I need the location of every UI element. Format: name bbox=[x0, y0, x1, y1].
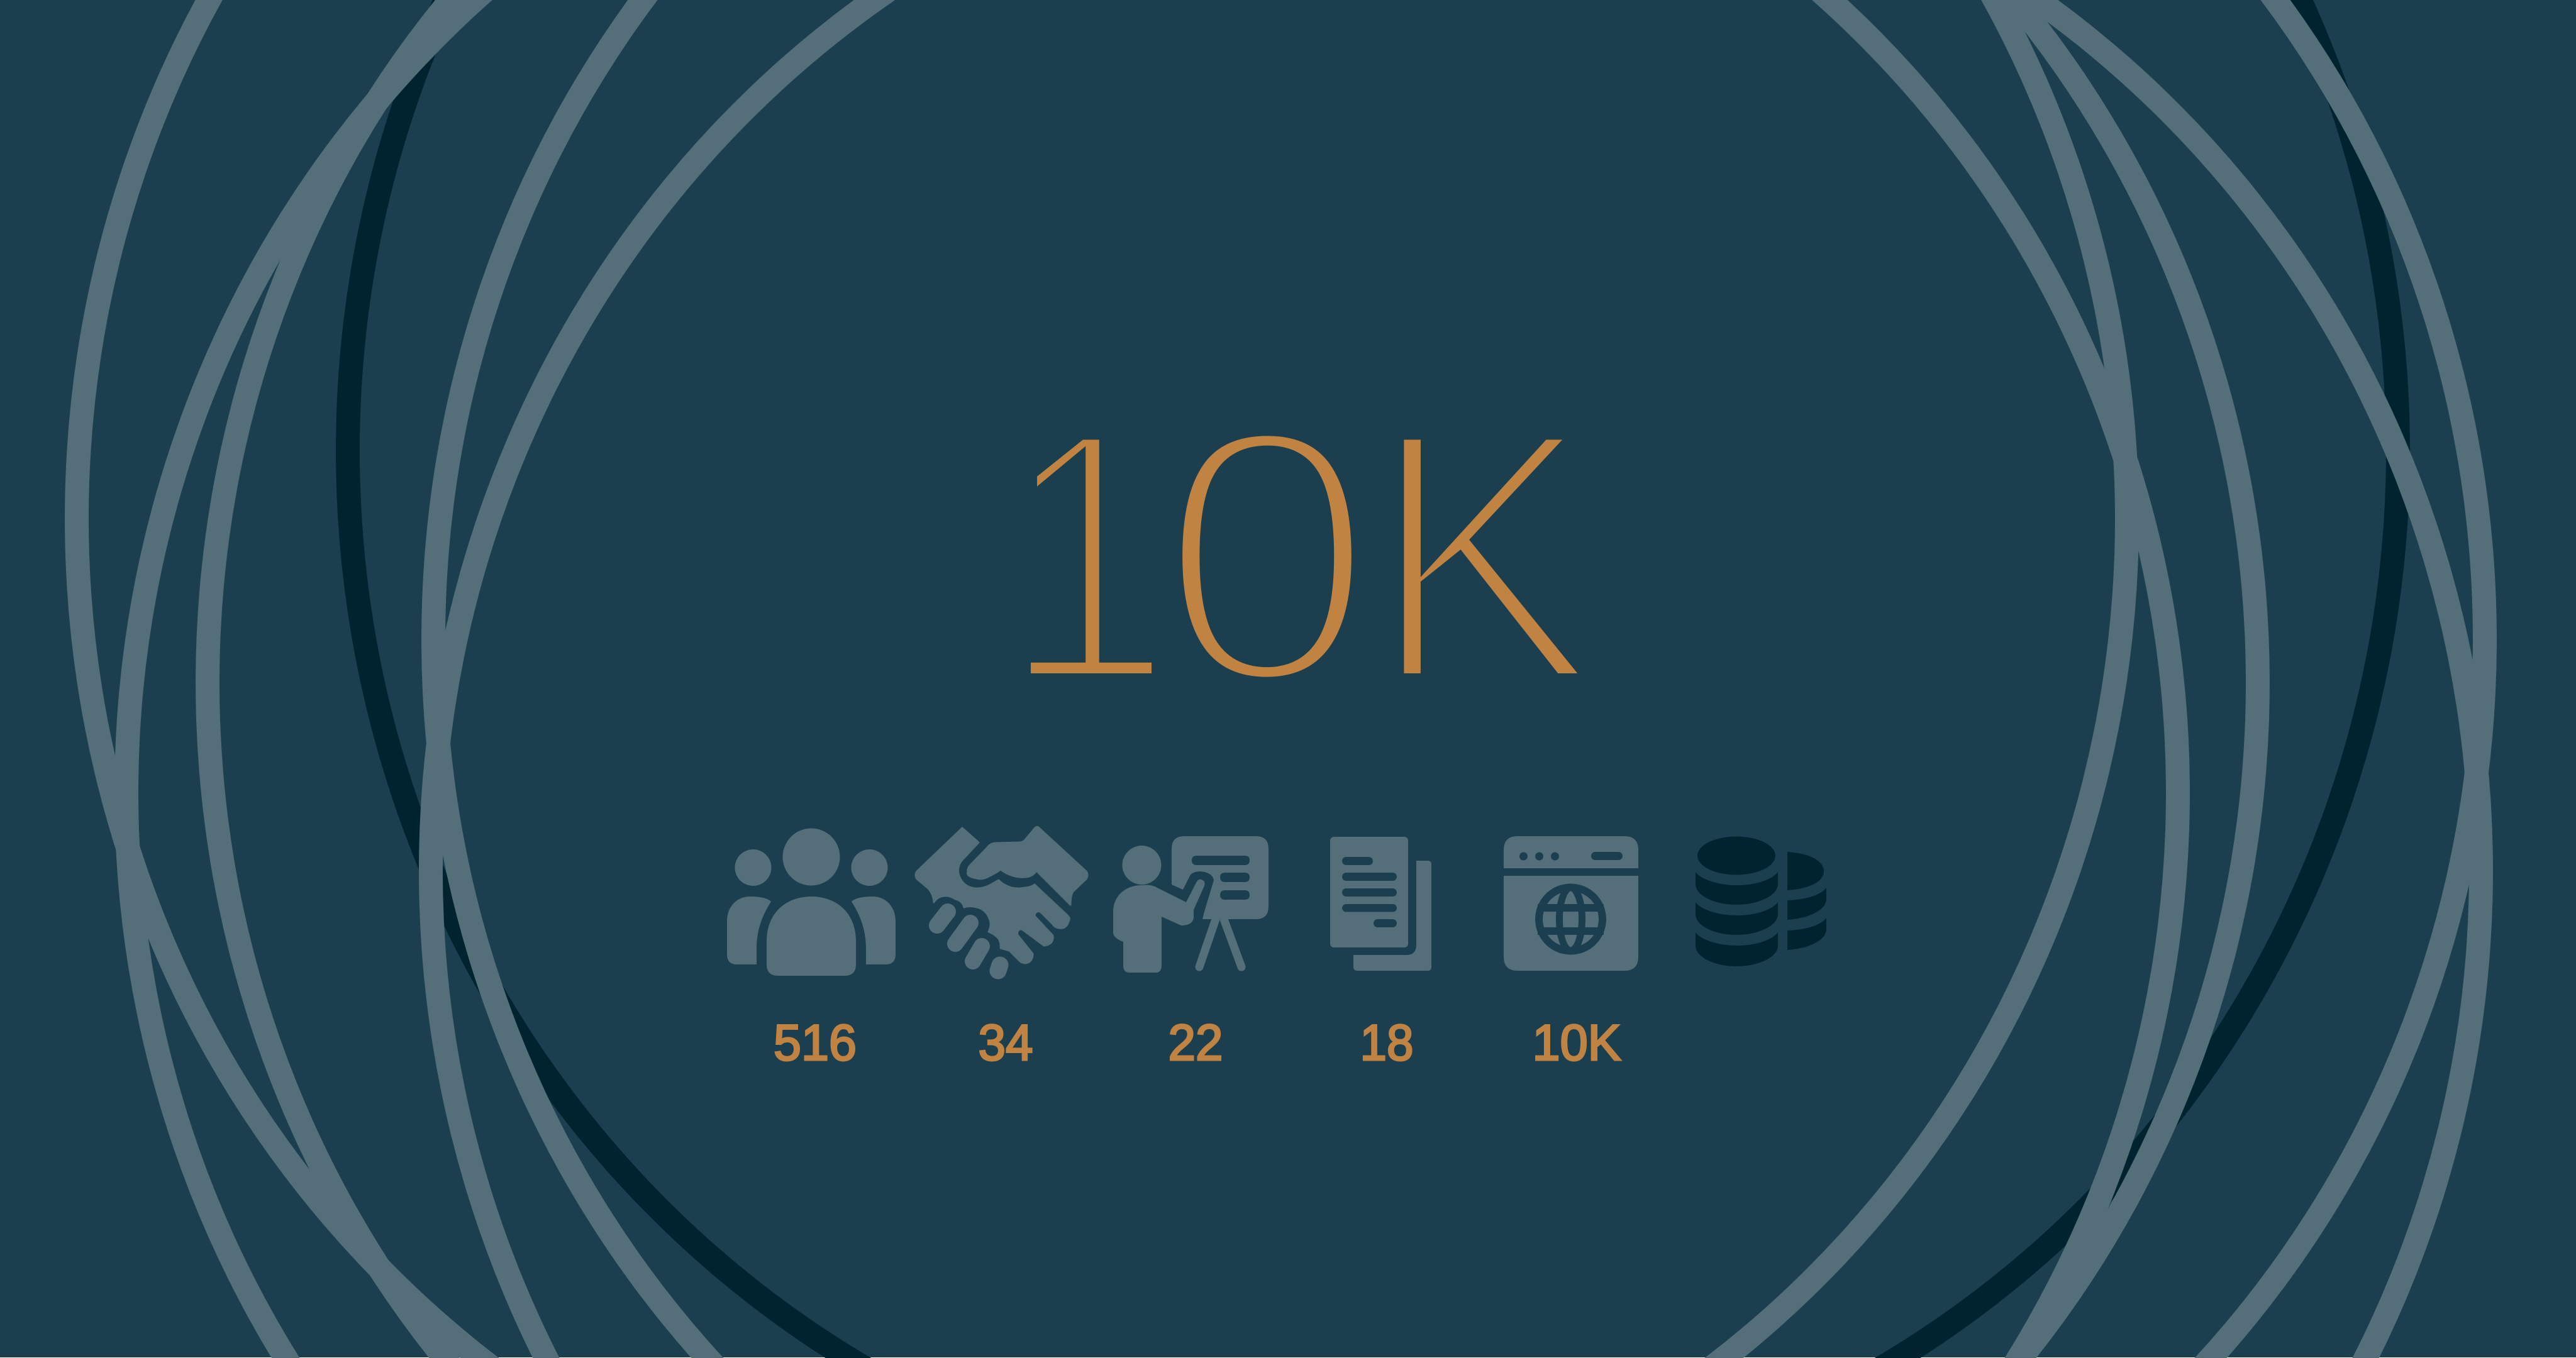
stat: publications: 18 bbox=[1360, 1015, 1414, 1071]
stat labels bbox=[774, 1015, 1621, 1071]
icon: people bbox=[727, 829, 896, 976]
stat: partnerships: 34 bbox=[979, 1015, 1033, 1071]
icon: coin stacks bbox=[1696, 836, 1826, 966]
title: 10K headline: K bbox=[1368, 353, 1598, 759]
stat: web visits: 10K bbox=[1532, 1015, 1621, 1071]
icon: presenter with board bbox=[1113, 836, 1269, 973]
stat: people: 516 bbox=[774, 1015, 857, 1071]
title: 10K headline: 1 bbox=[1000, 353, 1174, 759]
stat: presentations: 22 bbox=[1169, 1015, 1223, 1071]
icon: web browser with globe bbox=[1504, 836, 1638, 971]
icon: documents bbox=[1330, 837, 1431, 971]
title: 10K headline bbox=[1000, 353, 1598, 759]
title: 10K headline: 0 bbox=[1158, 353, 1375, 759]
icon: handshake bbox=[916, 827, 1087, 971]
